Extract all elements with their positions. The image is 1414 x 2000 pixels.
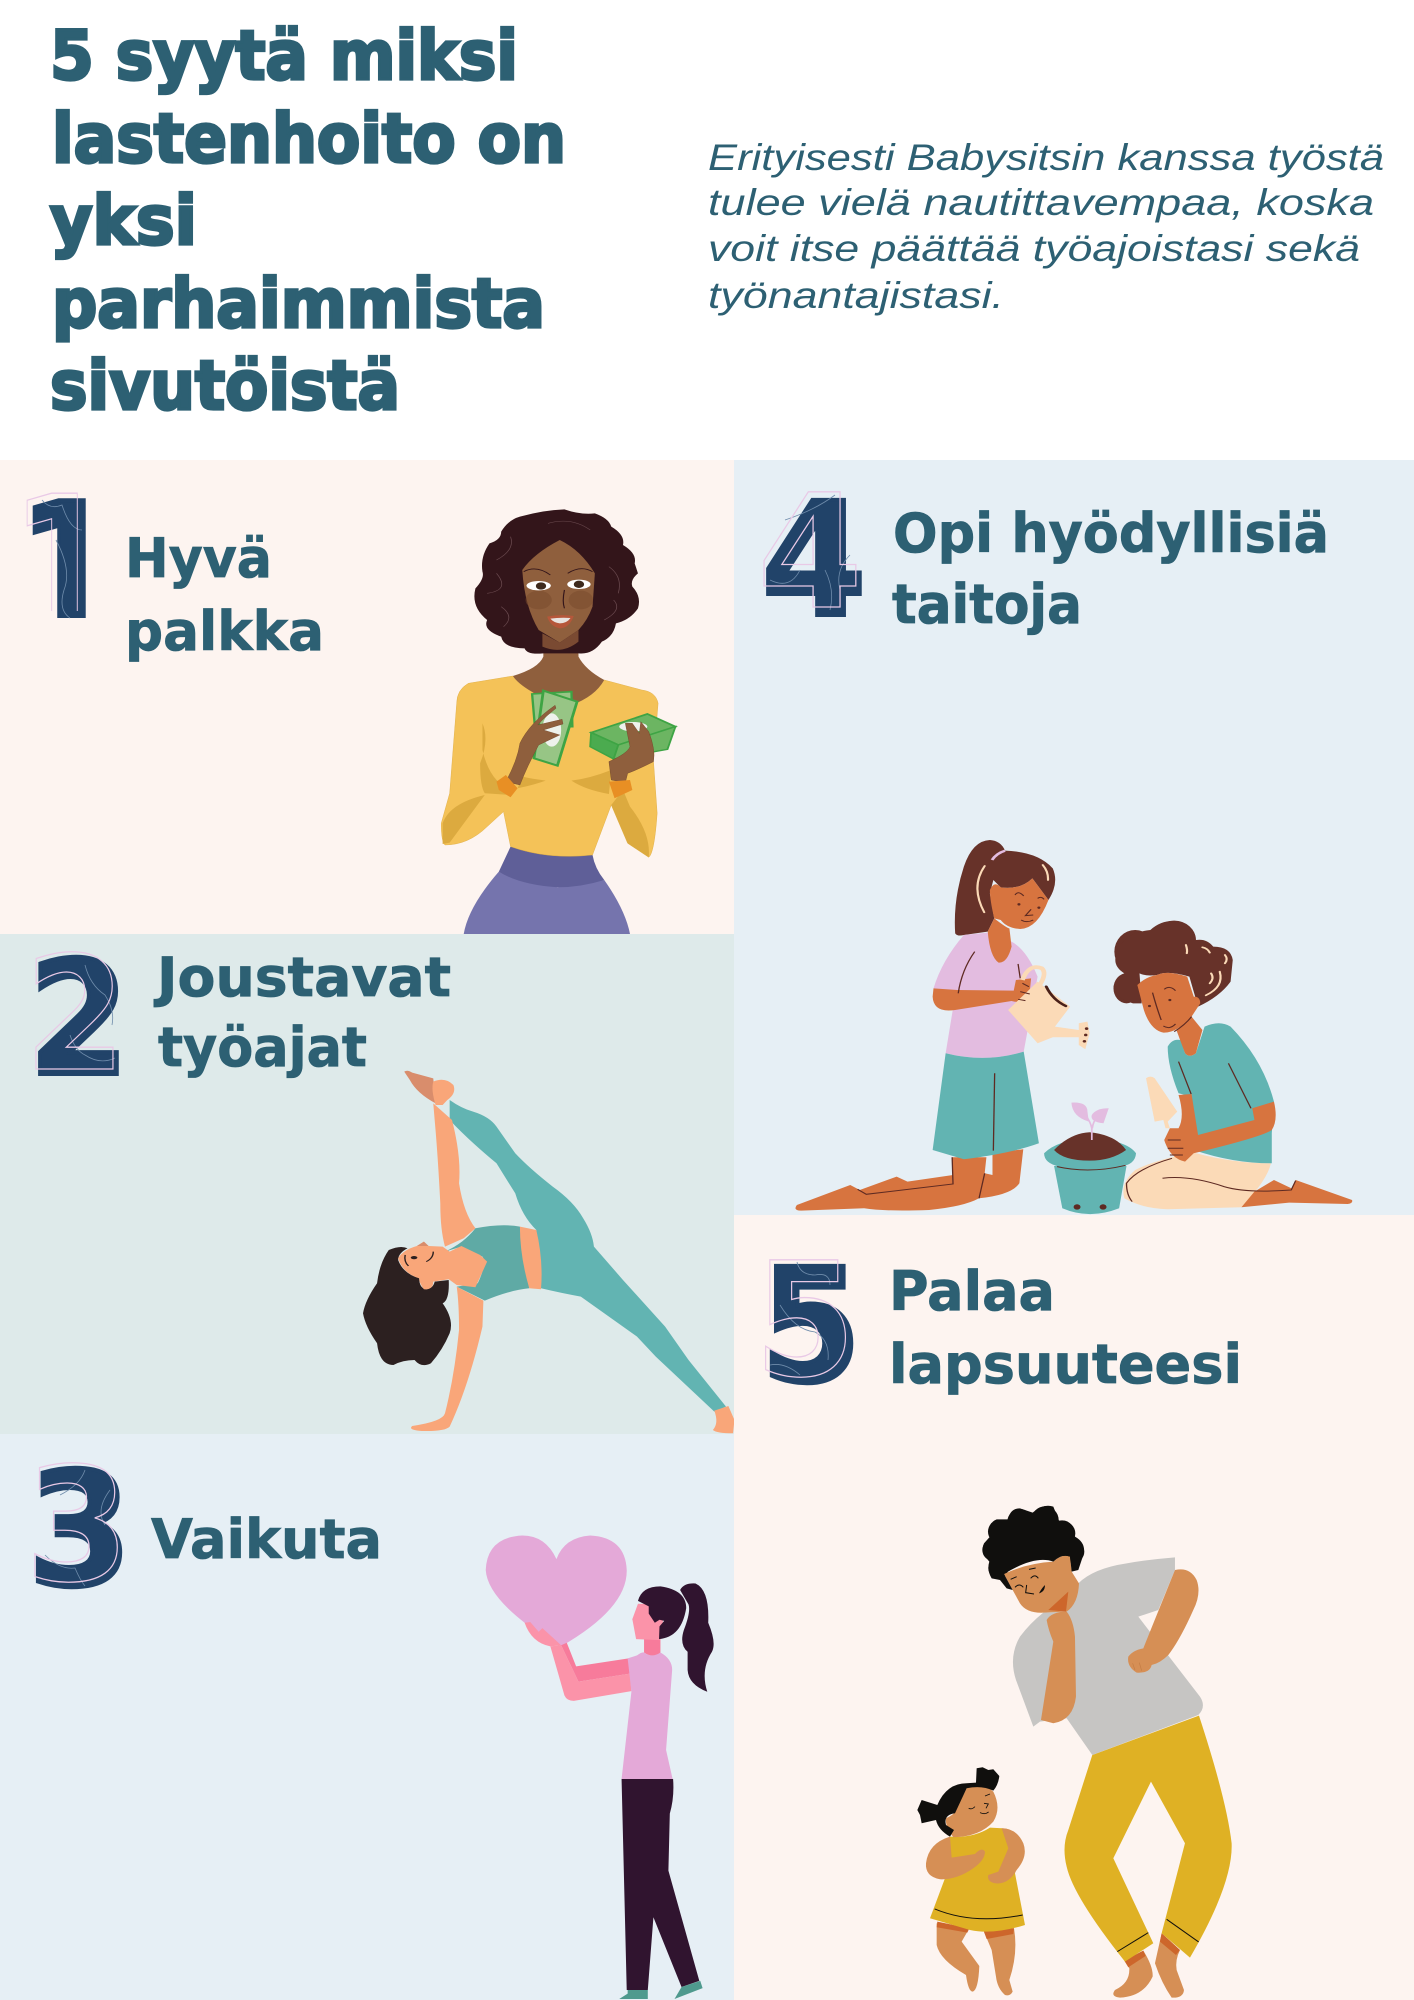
number 1: 1 <box>11 454 111 687</box>
title <box>50 17 566 426</box>
heading: Palaa lapsuuteesi: Palaa <box>889 1260 1055 1323</box>
title: sivutöistä <box>50 347 400 426</box>
heading: Palaa lapsuuteesi <box>889 1260 1242 1396</box>
illustration: woman doing yoga <box>363 1071 734 1433</box>
heading: Joustavat työajat: Joustavat <box>153 946 451 1009</box>
number 3: 3 <box>28 1439 132 1623</box>
title: parhaimmista <box>52 265 545 344</box>
panel: 2 flexible hours <box>0 922 734 1434</box>
heading: Hyvä palkka: Hyvä <box>125 527 272 590</box>
number 5: 5 <box>760 1234 862 1418</box>
intro text: tulee vielä nautittavempaa, koska <box>708 182 1374 223</box>
illustration: two people planting <box>795 840 1352 1214</box>
heading: Hyvä palkka <box>125 527 324 663</box>
intro text: Erityisesti Babysitsin kanssa työstä <box>708 137 1384 178</box>
number 2: 2 <box>24 922 126 1106</box>
title: yksi <box>50 182 197 261</box>
intro text <box>708 137 1384 316</box>
number 5: 5 <box>754 1228 856 1412</box>
panel: 4 learn useful skills <box>734 460 1414 1215</box>
number 3: 3 <box>25 1434 129 1618</box>
number 1 <box>26 492 86 618</box>
heading: Opi hyödyllisiä taitoja <box>892 502 1329 636</box>
illustration: woman holding a heart <box>486 1535 714 1999</box>
illustration: adult dancing with child <box>917 1506 1232 1998</box>
heading: Joustavat työajat: työajat <box>158 1016 367 1079</box>
number 2: 2 <box>28 927 130 1111</box>
panel: 5 return to childhood <box>734 1215 1414 2000</box>
number 4: 4 <box>761 468 867 653</box>
heading: Vaikuta: Vaikuta <box>151 1508 382 1571</box>
number 4: 4 <box>757 460 863 645</box>
heading: Opi hyödyllisiä taitoja: taitoja <box>892 573 1082 636</box>
panel: 3 make an impact <box>0 1434 734 2000</box>
heading: Hyvä palkka: palkka <box>125 600 324 663</box>
panel: 1 good pay <box>0 454 734 934</box>
intro text: voit itse päättää työajoistasi sekä <box>708 228 1360 269</box>
title: 5 syytä miksi <box>50 17 518 96</box>
illustration: woman holding money <box>441 509 675 934</box>
intro text: työnantajistasi. <box>708 275 1004 316</box>
heading: Palaa lapsuuteesi: lapsuuteesi <box>889 1333 1242 1396</box>
title: lastenhoito on <box>52 100 566 179</box>
heading: Opi hyödyllisiä taitoja: Opi hyödyllisiä <box>893 502 1329 565</box>
number 1: 1 <box>18 461 118 694</box>
heading: Joustavat työajat <box>153 946 451 1079</box>
